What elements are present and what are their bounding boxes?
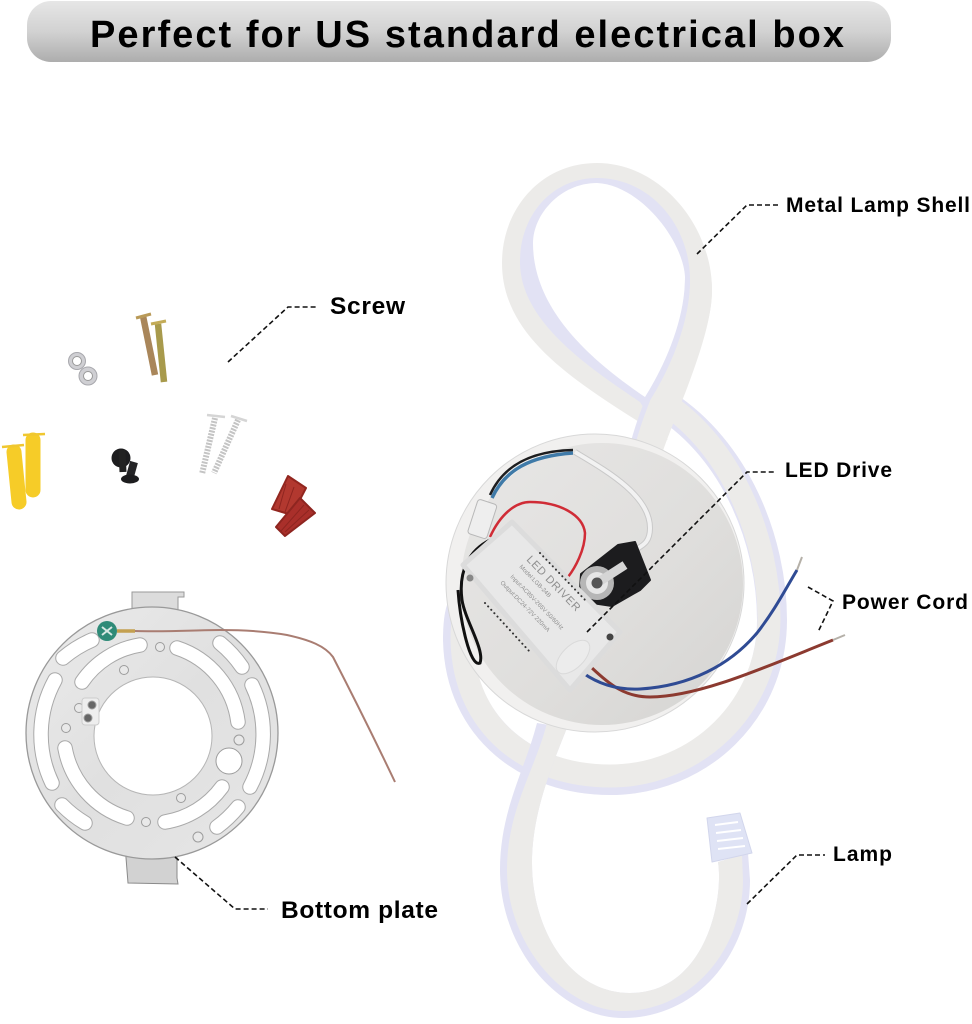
icon: brass screws (136, 314, 166, 382)
callout: Screw (228, 293, 406, 362)
ceiling disc (446, 434, 744, 732)
lamp ring strand (458, 402, 772, 780)
callout: Metal Lamp Shell: Metal Lamp Shell (786, 194, 970, 217)
internal wires (458, 450, 585, 663)
title banner (27, 1, 891, 62)
callout: Bottom plate (175, 857, 438, 924)
panel: bottom plate (26, 592, 395, 884)
lamp lower strand (500, 723, 750, 1018)
white cord (575, 452, 650, 552)
LED driver box (463, 522, 620, 690)
LED driver box: Model:LGB-24B (518, 564, 552, 599)
callout: Bottom plate: Bottom plate (281, 897, 438, 924)
callout: Metal Lamp Shell (697, 194, 970, 254)
LED driver box: LED DRIVER (524, 554, 583, 614)
icon: plate round hole and dimples (62, 642, 244, 842)
callout: Power Cord: Power Cord (842, 591, 968, 614)
icon: green ground screw (97, 621, 135, 641)
black bracket and nut (580, 542, 650, 606)
panel: lamp (446, 163, 845, 1018)
wire connector (467, 499, 497, 539)
icon: plate centre hole (94, 677, 212, 795)
callout: Lamp (747, 843, 892, 904)
icon: hex nuts (68, 352, 97, 385)
lamp upper loop (502, 163, 712, 460)
icon: yellow wall anchors (2, 434, 45, 502)
icon: red wire nuts (272, 476, 315, 536)
icon: white self-tapping screws (202, 415, 247, 474)
icon: ground wire (135, 630, 395, 782)
LED driver box: Output:DC24-72V 220mA (499, 580, 550, 634)
icon: plate slots (41, 640, 263, 827)
lamp end cap (707, 813, 752, 862)
icon: black screws (112, 448, 139, 484)
callout: LED Drive (587, 459, 892, 632)
icon: plate tabs (125, 592, 184, 884)
panel: accessories (2, 314, 315, 536)
callout: Screw: Screw (330, 293, 406, 320)
icon: plate disc (26, 607, 278, 859)
callout: Power Cord (808, 587, 968, 632)
callout: Lamp: Lamp (833, 843, 892, 866)
title banner: Perfect for US standard electrical box (90, 14, 844, 56)
power cord wires (583, 557, 845, 697)
callout: LED Drive: LED Drive (785, 459, 892, 482)
LED driver box: Input:AC85V-265V 50/60Hz (509, 574, 564, 631)
